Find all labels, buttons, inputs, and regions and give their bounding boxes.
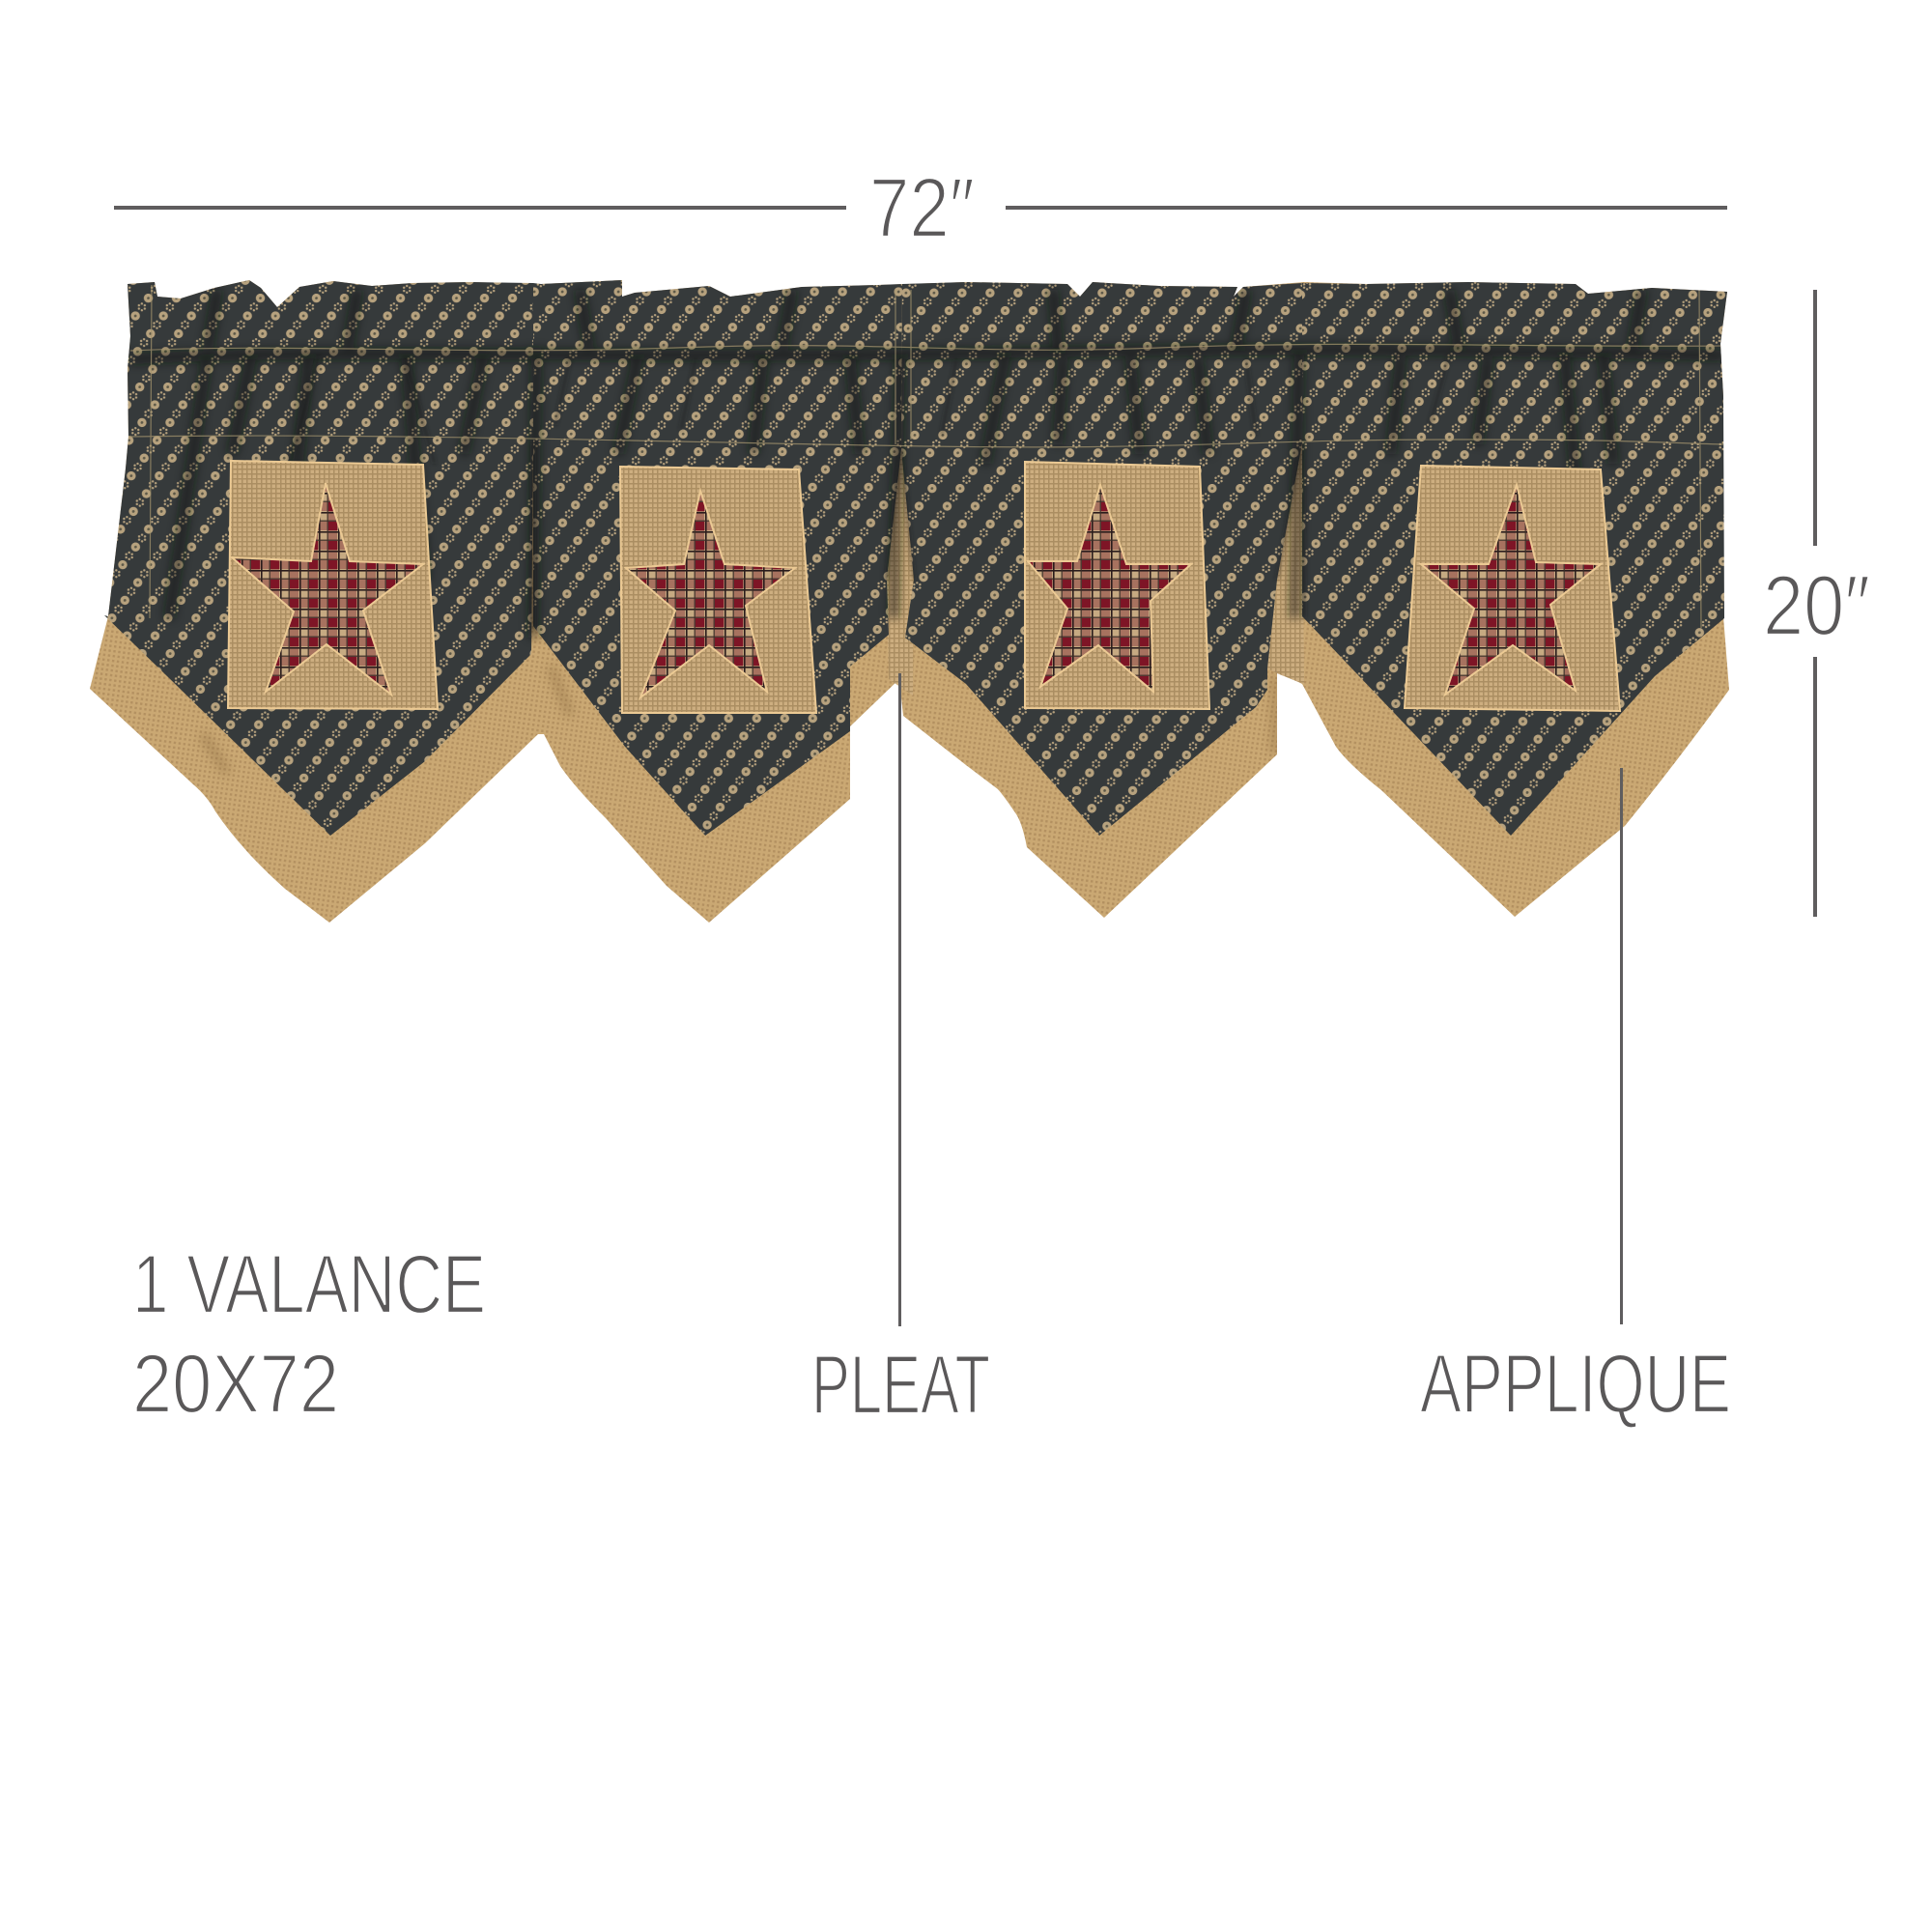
panel 3 fabric <box>901 282 1302 836</box>
patch <box>228 461 438 709</box>
patch <box>1025 462 1209 709</box>
applique leader line <box>1620 768 1623 1324</box>
applique label: APPLIQUE <box>1420 1338 1731 1431</box>
applique callout <box>1420 768 1731 1431</box>
quantity line: 1 VALANCE <box>132 1238 486 1331</box>
applique square 4 <box>1405 466 1620 711</box>
dimension: height 20 inches <box>1763 290 1870 917</box>
dimension: width 72 inches <box>114 161 1727 255</box>
plaid star <box>626 491 795 697</box>
height label: 20″ <box>1763 557 1870 653</box>
panel 2 fabric <box>533 280 902 836</box>
patch <box>620 467 816 713</box>
plaid star <box>1421 485 1601 695</box>
plaid star <box>232 483 423 695</box>
trim silhouette <box>90 280 1729 923</box>
panel 1 fabric <box>104 280 533 836</box>
valance product <box>90 280 1729 923</box>
pleat label: PLEAT <box>811 1339 990 1432</box>
height line lower segment <box>1813 657 1817 917</box>
pleat leader line <box>898 673 901 1326</box>
stitching lines <box>128 285 1723 628</box>
gathered fold shading <box>128 285 1723 773</box>
applique square 3 <box>1025 462 1209 709</box>
patch <box>1405 466 1620 711</box>
soft dark folds <box>130 290 1723 638</box>
pleat insert 1 <box>887 449 914 696</box>
trim creases <box>203 667 1275 773</box>
size line: 20X72 <box>132 1338 339 1431</box>
width line right segment <box>1006 206 1727 210</box>
plaid star <box>1028 485 1191 692</box>
product description <box>132 1238 486 1431</box>
applique square 1 <box>228 461 438 709</box>
width line left segment <box>114 206 846 210</box>
pleat callout <box>811 673 990 1432</box>
applique square 2 <box>620 467 816 713</box>
panel 4 fabric <box>1302 282 1727 836</box>
width label: 72″ <box>869 161 975 255</box>
pleat insert 2 <box>1267 443 1304 684</box>
height line upper segment <box>1813 290 1817 546</box>
crisp fold lines <box>290 355 1449 628</box>
